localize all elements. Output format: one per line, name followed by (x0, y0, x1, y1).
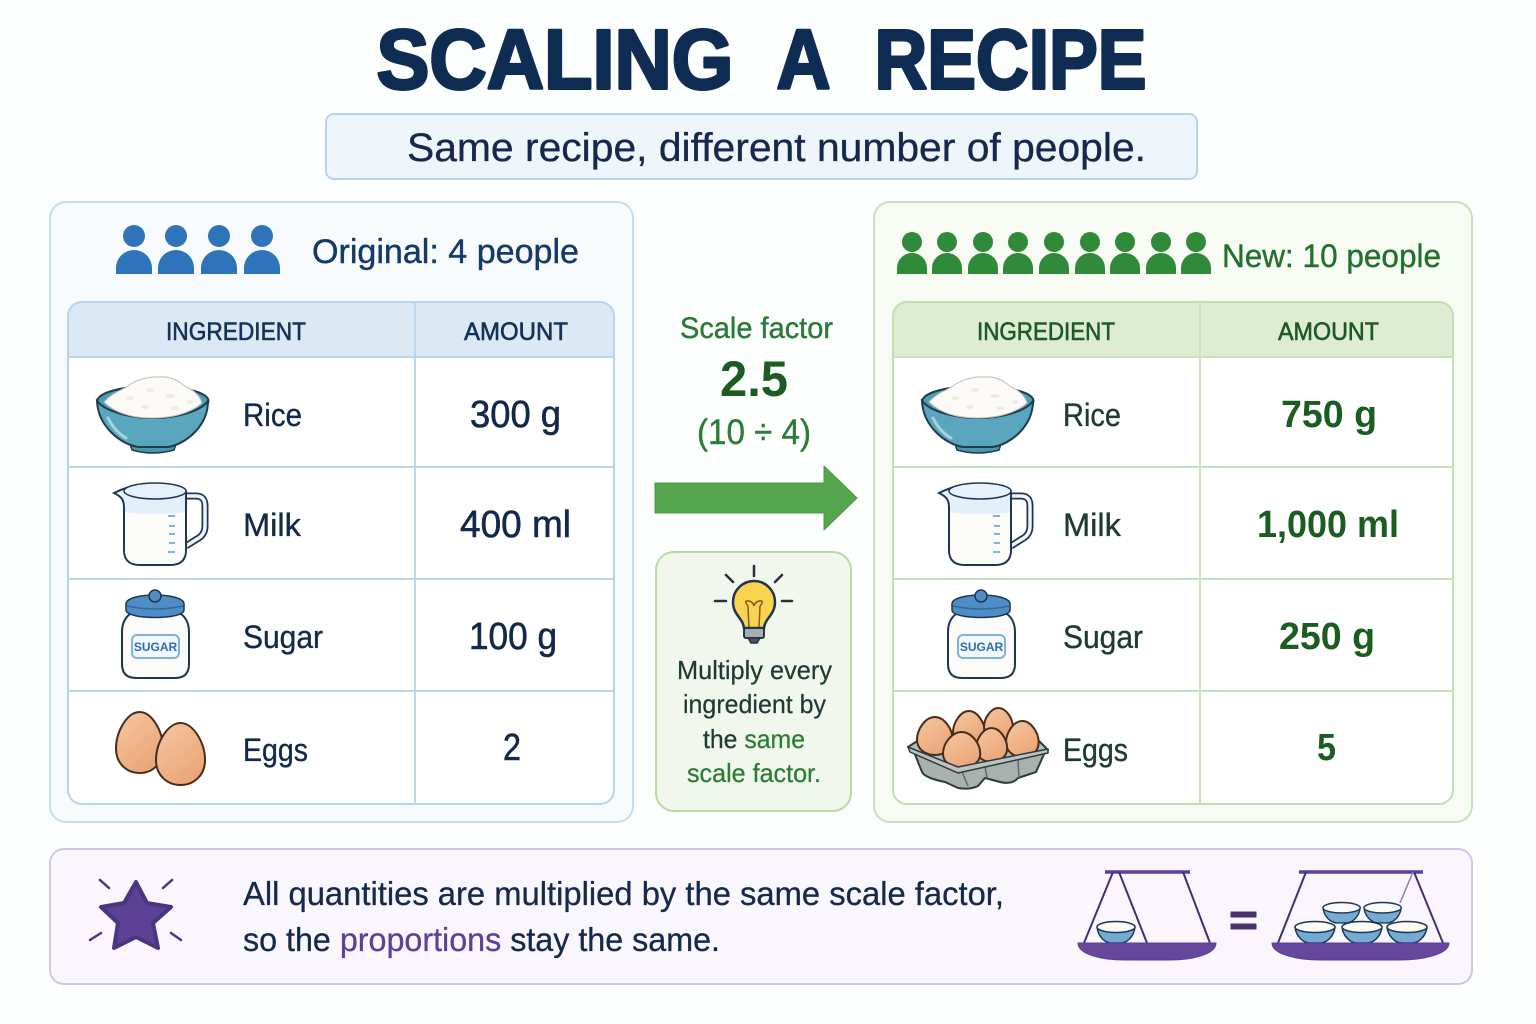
icon: two eggs (116, 712, 205, 785)
label: eggs: Eggs (243, 732, 308, 768)
amount: 1,000 ml: 1,000 ml (1257, 504, 1399, 546)
scale factor label: (10 ÷ 4) (697, 413, 811, 452)
takeaway text (243, 875, 1004, 958)
header: amount: AMOUNT (464, 318, 568, 346)
label: milk: Milk (1063, 507, 1122, 543)
label: eggs: Eggs (1063, 732, 1128, 768)
icon: rice bowl (922, 377, 1034, 453)
arrow (655, 466, 857, 530)
icon: balance with one bowl (1078, 872, 1216, 960)
icon: star (90, 880, 181, 948)
label: sugar: Sugar (1063, 619, 1143, 655)
amount: 100 g: 100 g (469, 616, 557, 658)
title: A (776, 12, 830, 106)
icon: sugar jar (122, 590, 189, 678)
amount: 300 g: 300 g (470, 394, 561, 436)
icon: sugar jar (948, 590, 1015, 678)
scale factor label (680, 312, 833, 452)
title: RECIPE (874, 12, 1146, 106)
scale factor label: 2.5 (720, 351, 788, 407)
icon: rice bowl (97, 377, 208, 453)
header: ingredient: INGREDIENT (977, 318, 1115, 346)
table: original amounts (68, 302, 614, 804)
original heading: Original: 4 people (312, 233, 579, 271)
scale factor label: Scale factor (680, 312, 833, 345)
icon: egg carton (908, 708, 1048, 789)
label: rice: Rice (1063, 397, 1121, 433)
header: ingredient: INGREDIENT (166, 318, 306, 346)
amount: 750 g: 750 g (1281, 394, 1377, 436)
takeaway text: All quantities are multiplied by the same scale factor, (243, 875, 1004, 912)
tip text: ingredient by (683, 689, 826, 719)
header: amount: AMOUNT (1278, 318, 1379, 346)
title: SCALING (376, 12, 734, 106)
subtitle banner (326, 114, 1197, 179)
amount: 2: 2 (503, 727, 521, 769)
label: milk: Milk (243, 507, 302, 543)
icon: four people (116, 225, 280, 274)
tip text (677, 655, 832, 788)
equals sign (1231, 912, 1256, 929)
takeaway text: so the proportions stay the same. (243, 921, 720, 958)
amount: 250 g: 250 g (1279, 616, 1375, 658)
amount: 5: 5 (1317, 727, 1336, 769)
tip text: Multiply every (677, 655, 832, 685)
label: rice: Rice (243, 397, 302, 433)
icon: nine-figure people row (897, 232, 1211, 274)
amount: 400 ml: 400 ml (460, 504, 571, 546)
icon: sugar jar: SUGAR (134, 640, 177, 654)
tip text: scale factor. (687, 758, 821, 788)
title (376, 12, 1146, 106)
new heading: New: 10 people (1222, 238, 1441, 274)
icon: measuring cup (939, 483, 1030, 565)
callout: multiply tip (656, 552, 851, 811)
icon: light bulb (715, 566, 792, 643)
panel: new recipe (874, 202, 1472, 822)
icon: balance with five bowls (1272, 872, 1449, 960)
tip text: the same (703, 724, 805, 754)
label: sugar: Sugar (243, 619, 323, 655)
icon: measuring cup (114, 483, 205, 565)
panel: original recipe (50, 202, 633, 822)
panel: proportions takeaway (50, 849, 1472, 984)
subtitle banner: Same recipe, different number of people. (407, 126, 1146, 170)
icon: sugar jar: SUGAR (960, 640, 1003, 654)
table: scaled amounts (893, 302, 1453, 804)
